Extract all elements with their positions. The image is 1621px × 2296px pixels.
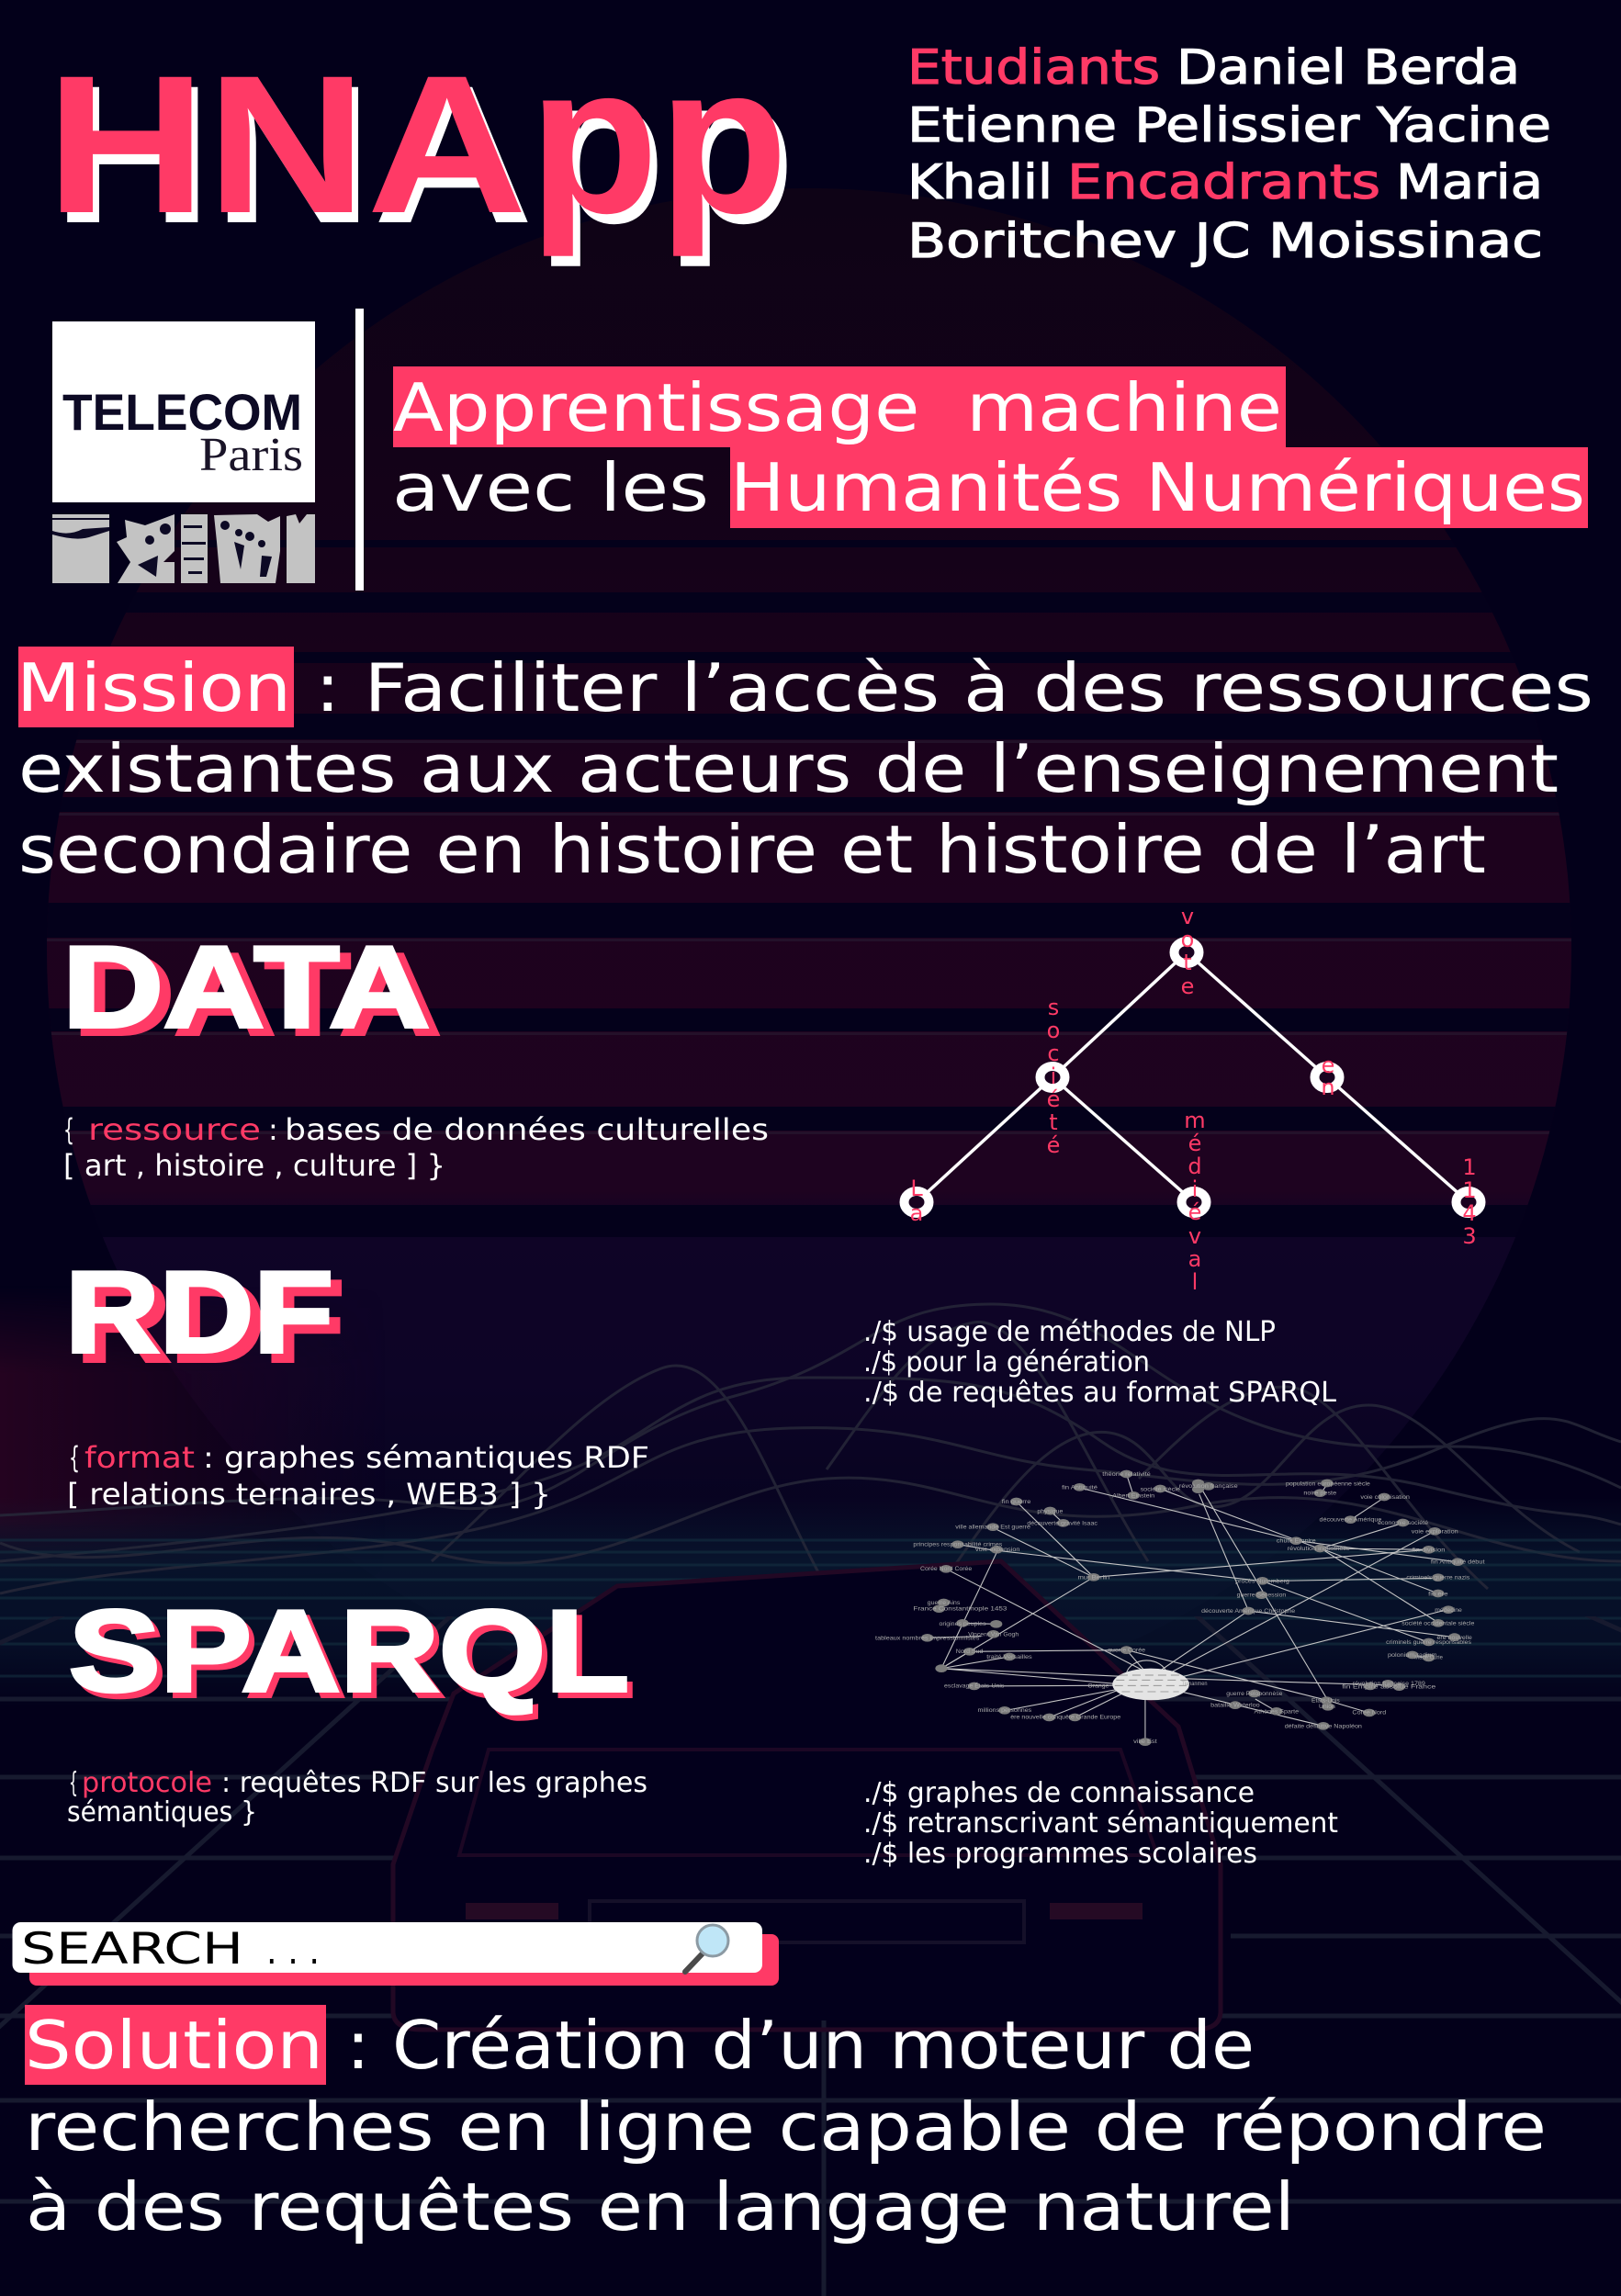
knowledge graph: défaite définitive Napoléon bbox=[1285, 1722, 1362, 1729]
title: HNApp: pp bbox=[536, 31, 795, 267]
tree diagram: dependency parse: 1 bbox=[1462, 1154, 1477, 1180]
tree diagram: dependency parse: a bbox=[910, 1200, 923, 1226]
knowledge graph: fin ère bbox=[1428, 1590, 1448, 1597]
tree diagram: dependency parse: d bbox=[1188, 1154, 1202, 1179]
knowledge graph: fin guerre bbox=[1002, 1498, 1031, 1505]
tree diagram: dependency parse: 3 bbox=[1462, 1223, 1477, 1249]
mission statement bbox=[17, 647, 1593, 888]
knowledge graph: Vincent Van Gogh bbox=[968, 1630, 1019, 1638]
knowledge graph: Nord Sud bbox=[956, 1648, 984, 1655]
solution statement: : Création d’un moteur de bbox=[346, 2007, 1255, 2084]
tree diagram: dependency parse: o bbox=[1047, 1018, 1060, 1043]
tree diagram: dependency parse: é bbox=[1047, 1132, 1060, 1158]
knowledge graph: société siècle bbox=[1141, 1485, 1180, 1492]
mission statement: Mission bbox=[17, 649, 291, 726]
text: rdf description: format bbox=[84, 1440, 195, 1475]
knowledge graph: découverte gravité Isaac bbox=[1027, 1519, 1098, 1526]
knowledge graph: chute Empire bbox=[1277, 1536, 1316, 1544]
knowledge graph: Tiananmen bbox=[1181, 1680, 1208, 1687]
knowledge graph: découverte Amérique Christophe bbox=[1201, 1607, 1295, 1615]
tree diagram: dependency parse: i bbox=[1051, 1064, 1056, 1089]
tree diagram: dependency parse: o bbox=[1181, 927, 1194, 952]
subtitle: machine learning with digital humanities: Apprentissage machine bbox=[393, 369, 1282, 446]
heading: DATA: DATA bbox=[73, 929, 441, 1059]
solution statement: recherches en ligne capable de répondre bbox=[25, 2088, 1547, 2166]
subtitle: machine learning with digital humanities bbox=[392, 366, 1588, 528]
tree diagram: dependency parse: e bbox=[1322, 1052, 1334, 1078]
text: data description: bases de données culturelles bbox=[285, 1112, 769, 1147]
knowledge graph: fin Antiquité bbox=[1062, 1483, 1098, 1491]
knowledge graph: ère nouvelle conquête Grande Europe bbox=[1010, 1713, 1120, 1720]
title: HNApp: pp bbox=[529, 21, 788, 257]
tree diagram: dependency parse: é bbox=[1188, 1131, 1201, 1156]
logo: Telecom Paris bbox=[52, 321, 315, 583]
knowledge graph: révolution française 1789 bbox=[1353, 1680, 1425, 1687]
tree diagram: dependency parse: a bbox=[1188, 1246, 1201, 1272]
knowledge graph: ville Est bbox=[1133, 1738, 1157, 1745]
knowledge graph: société occidentale siècle bbox=[1401, 1619, 1475, 1626]
tree diagram: dependency parse: 1 bbox=[1462, 1177, 1477, 1203]
heading: SPARQL: SPARQL bbox=[74, 1592, 635, 1721]
tree diagram: dependency parse: L bbox=[910, 1176, 923, 1201]
subtitle: machine learning with digital humanities: avec les bbox=[392, 449, 709, 526]
tree diagram: dependency parse: n bbox=[1321, 1075, 1335, 1100]
text: NLP terminal lines bbox=[863, 1316, 1336, 1409]
knowledge graph: France Constantinople 1453 bbox=[913, 1604, 1007, 1612]
tree diagram: dependency parse: t bbox=[1183, 950, 1192, 975]
knowledge graph: Corée Nord bbox=[1352, 1708, 1386, 1716]
title: HNApp bbox=[46, 21, 795, 267]
logo: Telecom Paris: TELECOM bbox=[62, 383, 302, 441]
knowledge graph: médecine bbox=[1435, 1606, 1462, 1614]
title: HNApp: HNA bbox=[52, 45, 534, 264]
knowledge graph: ville allemande Est guerre bbox=[955, 1523, 1030, 1530]
credits: students and supervisors: Maria bbox=[1396, 155, 1543, 210]
tree diagram: dependency parse: é bbox=[1047, 1086, 1060, 1112]
knowledge graph: principes responsabilité crimes bbox=[913, 1540, 1002, 1548]
text: NLP terminal lines: ./$ usage de méthodes de NLP bbox=[863, 1316, 1276, 1348]
knowledge graph: esclavage États-Unis bbox=[944, 1682, 1004, 1689]
tree diagram: dependency parse: t bbox=[1049, 1109, 1058, 1135]
knowledge graph: guerre Ains bbox=[928, 1599, 960, 1606]
knowledge graph: tableaux nombres impressionnistes bbox=[875, 1634, 979, 1641]
text: knowledge graph terminal lines bbox=[863, 1777, 1338, 1870]
text: data description: ressource bbox=[88, 1112, 261, 1147]
knowledge graph: ère nouvelle bbox=[1437, 1634, 1472, 1641]
knowledge graph: fin Antiquité début bbox=[1431, 1558, 1485, 1565]
credits: students and supervisors: Daniel Berda bbox=[1176, 40, 1520, 96]
title: HNApp: HNA bbox=[46, 35, 527, 254]
knowledge graph: Orange bbox=[1087, 1682, 1109, 1689]
vertical divider bbox=[355, 309, 364, 591]
knowledge graph: criminels guerre responsables bbox=[1386, 1638, 1471, 1646]
text: NLP terminal lines: ./$ pour la génération bbox=[863, 1346, 1150, 1379]
text: data description: : bbox=[268, 1112, 278, 1147]
mission statement: secondaire en histoire et histoire de l’art bbox=[18, 811, 1486, 888]
tree diagram: dependency parse: m bbox=[1184, 1108, 1206, 1133]
knowledge graph: origines peuples bbox=[939, 1620, 985, 1627]
text: sparql description bbox=[67, 1767, 647, 1829]
search bar: SEARCH bbox=[21, 1924, 243, 1975]
knowledge graph: noire peste bbox=[1303, 1489, 1336, 1496]
knowledge graph: Corée Nord Corée bbox=[920, 1565, 972, 1572]
tree diagram: dependency parse: c bbox=[1047, 1041, 1060, 1066]
knowledge graph: voie expansion bbox=[975, 1546, 1020, 1553]
solution statement: à des requêtes en langage naturel bbox=[26, 2168, 1295, 2245]
heading: SPARQL: SPARQL bbox=[69, 1586, 629, 1716]
text: sparql description: : requêtes RDF sur les graphes bbox=[221, 1767, 647, 1799]
knowledge graph bbox=[875, 1470, 1485, 1746]
knowledge graph: voie exploration bbox=[1412, 1527, 1458, 1535]
knowledge graph: criminels guerre nazis bbox=[1406, 1573, 1469, 1581]
tree diagram: dependency parse: 4 bbox=[1462, 1200, 1477, 1226]
knowledge graph: théorie relativité bbox=[1102, 1470, 1151, 1478]
text: knowledge graph terminal lines: ./$ graphes de connaissance bbox=[863, 1777, 1255, 1809]
tree diagram: dependency parse: v bbox=[1181, 904, 1194, 929]
heading: RDF: RDF bbox=[76, 1256, 344, 1386]
solution statement bbox=[25, 2005, 1547, 2245]
knowledge graph: Union bbox=[1319, 1703, 1335, 1710]
heading: RDF: RDF bbox=[65, 1247, 333, 1377]
tree diagram: dependency parse: e bbox=[1181, 974, 1194, 999]
knowledge graph: mur Berlin bbox=[1077, 1573, 1109, 1581]
knowledge graph: guerre Sécession bbox=[1237, 1591, 1286, 1598]
search bar: . . . bbox=[266, 1930, 320, 1973]
knowledge graph: fin division bbox=[1413, 1546, 1446, 1553]
text: rdf description: [ relations ternaires , WEB3 ] } bbox=[67, 1477, 551, 1512]
tree diagram: dependency parse: l bbox=[1192, 1269, 1198, 1295]
knowledge graph: révolution française bbox=[1179, 1482, 1238, 1490]
mission statement: existantes aux acteurs de l’enseignement bbox=[18, 730, 1559, 807]
knowledge graph: économie société bbox=[1378, 1519, 1428, 1526]
text: rdf description: { bbox=[69, 1440, 80, 1475]
knowledge graph: guerre Péloponnèse bbox=[1226, 1690, 1283, 1697]
tree diagram: dependency parse: é bbox=[1188, 1199, 1201, 1225]
heading: DATA: DATA bbox=[62, 922, 430, 1052]
text: knowledge graph terminal lines: ./$ les programmes scolaires bbox=[863, 1838, 1257, 1870]
tree diagram: dependency parse bbox=[904, 904, 1480, 1295]
text: sparql description: { bbox=[69, 1767, 78, 1799]
knowledge graph: Athènes Sparte bbox=[1255, 1707, 1299, 1715]
subtitle: machine learning with digital humanities: Humanités Numériques bbox=[730, 449, 1585, 526]
credits: students and supervisors: Etienne Pelissier Yacine bbox=[907, 98, 1551, 153]
mission statement: : Faciliter l’accès à des ressources bbox=[315, 649, 1593, 726]
tree diagram: dependency parse: v bbox=[1188, 1223, 1201, 1249]
knowledge graph: États-Unis bbox=[1311, 1696, 1340, 1704]
knowledge graph: voie colonisation bbox=[1360, 1493, 1410, 1501]
solution statement: Solution bbox=[25, 2007, 323, 2084]
credits: students and supervisors: Khalil bbox=[907, 155, 1053, 210]
text: data description bbox=[63, 1112, 769, 1183]
knowledge graph: Albert Einstein bbox=[1112, 1491, 1154, 1499]
text: sparql description: sémantiques } bbox=[67, 1796, 257, 1829]
text: knowledge graph terminal lines: ./$ retranscrivant sémantiquement bbox=[863, 1807, 1338, 1840]
knowledge graph: polonium radium bbox=[1388, 1651, 1437, 1659]
knowledge graph: guerre Corée bbox=[1108, 1646, 1145, 1653]
knowledge graph: bataille Waterloo bbox=[1210, 1701, 1260, 1708]
text: NLP terminal lines: ./$ de requêtes au format SPARQL bbox=[863, 1377, 1336, 1409]
tree diagram: dependency parse: s bbox=[1048, 995, 1059, 1020]
text: sparql description: protocole bbox=[82, 1767, 212, 1799]
knowledge graph: population européenne siècle bbox=[1286, 1480, 1370, 1487]
tree diagram: dependency parse: i bbox=[1192, 1176, 1198, 1202]
text: rdf description bbox=[67, 1440, 649, 1512]
knowledge graph: procès Nuremberg bbox=[1235, 1577, 1289, 1584]
knowledge graph: découverte Amérique bbox=[1319, 1515, 1381, 1523]
credits: students and supervisors: Boritchev JC Moissinac bbox=[907, 214, 1543, 269]
knowledge graph: fin Empire absolue France bbox=[1342, 1683, 1435, 1690]
knowledge graph: traité Versailles bbox=[986, 1653, 1032, 1660]
knowledge graph: millions personnes bbox=[978, 1706, 1031, 1714]
text: data description: [ art , histoire , culture ] } bbox=[63, 1148, 445, 1183]
text: data description: { bbox=[63, 1112, 74, 1147]
icon: magnifying glass bbox=[685, 1925, 728, 1972]
credits: students and supervisors bbox=[907, 40, 1551, 269]
text: rdf description: : graphes sémantiques RDF bbox=[203, 1440, 649, 1475]
knowledge graph: Marie Curie bbox=[1414, 1653, 1443, 1660]
logo: Telecom Paris: Paris bbox=[199, 429, 303, 481]
credits: students and supervisors: Encadrants bbox=[1067, 155, 1380, 210]
knowledge graph: révolution industrielle bbox=[1288, 1545, 1350, 1552]
knowledge graph: physique bbox=[1037, 1507, 1064, 1514]
credits: students and supervisors: Etudiants bbox=[907, 40, 1160, 96]
search bar bbox=[13, 1922, 779, 1986]
